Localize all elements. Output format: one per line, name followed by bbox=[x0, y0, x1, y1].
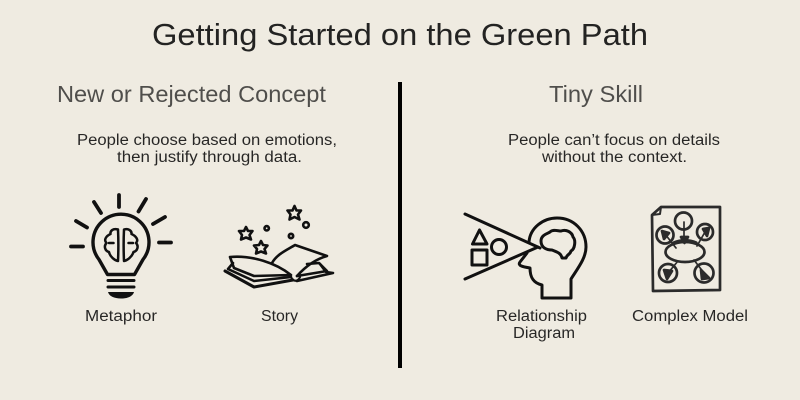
icon: light bulb with brain bbox=[71, 195, 171, 298]
panel: tiny skill bbox=[465, 81, 748, 342]
text block: context: without the context. bbox=[541, 149, 687, 166]
label: complex model: Complex Model bbox=[632, 308, 748, 325]
text block: emotions: People choose based on emotions, bbox=[77, 132, 337, 149]
label: relationship diagram: Relationship bbox=[496, 308, 587, 325]
heading: new or rejected concept: New or Rejected Concept bbox=[57, 81, 327, 107]
text block: emotions: then justify through data. bbox=[117, 149, 302, 166]
text block: context bbox=[508, 132, 720, 166]
label: relationship diagram bbox=[496, 308, 587, 342]
label: story: Story bbox=[261, 308, 298, 325]
label: metaphor: Metaphor bbox=[85, 308, 157, 325]
icon: head viewing shapes bbox=[465, 214, 586, 298]
text block: context: People can’t focus on details bbox=[508, 132, 720, 149]
label: relationship diagram: Diagram bbox=[513, 325, 575, 342]
center divider bbox=[398, 82, 402, 368]
icon: complex model sheet bbox=[652, 207, 720, 291]
text block: emotions bbox=[77, 132, 337, 166]
panel: new or rejected concept bbox=[57, 81, 337, 325]
icon: open book with stars bbox=[225, 206, 333, 287]
title: Getting Started on the Green Path bbox=[152, 17, 648, 52]
heading: tiny skill: Tiny Skill bbox=[549, 81, 643, 107]
